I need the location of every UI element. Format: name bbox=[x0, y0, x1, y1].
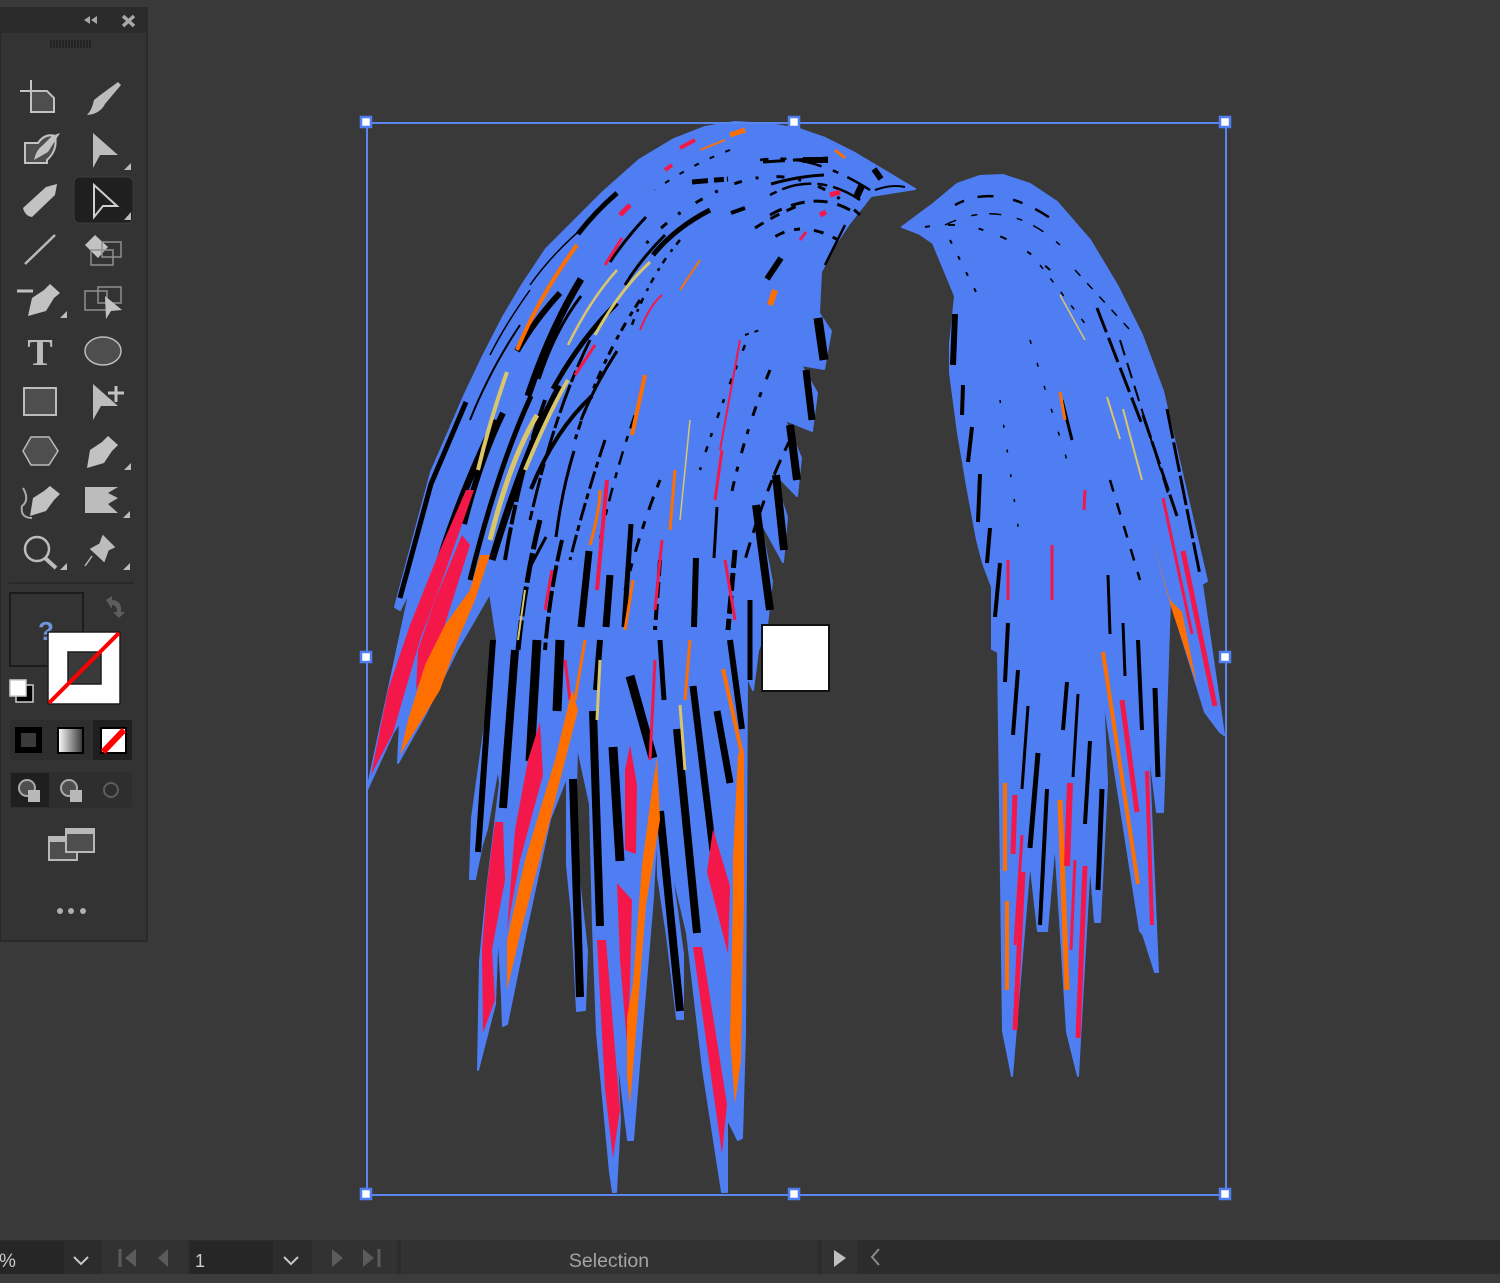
yellow streaks bbox=[1060, 295, 1142, 480]
icon: swap arrows bbox=[106, 596, 125, 618]
icon: rectangle bbox=[24, 388, 56, 415]
icon: pen with minus bbox=[17, 284, 67, 318]
left wing bbox=[367, 122, 915, 1192]
icon: arrow plus bbox=[93, 384, 124, 420]
icon: blob brush bbox=[25, 133, 60, 163]
status field: Selection bbox=[569, 1250, 649, 1272]
fill swatch none bbox=[48, 632, 120, 704]
icon: artboard selection bbox=[85, 287, 122, 319]
status field bbox=[401, 1240, 817, 1274]
icon: more tools dots bbox=[57, 908, 86, 914]
icon: line tool bbox=[25, 235, 55, 264]
icon: screen mode bbox=[49, 829, 94, 860]
yellow streaks bbox=[478, 262, 690, 770]
icon: direct selection arrow bbox=[93, 133, 131, 170]
zoom field bbox=[0, 1241, 64, 1274]
next and last buttons bbox=[312, 1240, 397, 1274]
icon: live paint bbox=[85, 235, 121, 265]
icon: zoom bbox=[25, 537, 67, 570]
black streaks bbox=[925, 196, 1200, 925]
icon: pencil bbox=[23, 184, 57, 217]
stroke swatch bbox=[10, 593, 83, 666]
selection handles bbox=[361, 117, 1230, 1199]
status play arrow bbox=[822, 1240, 857, 1274]
stroke swatch: ? bbox=[38, 616, 54, 646]
icon: selection tool active bbox=[74, 177, 133, 223]
icon: pin bbox=[85, 536, 130, 570]
panel header bbox=[0, 7, 146, 48]
artboard number field: 1 bbox=[195, 1251, 205, 1271]
icon: paintbrush bbox=[87, 82, 121, 115]
selection bounding box bbox=[367, 123, 1226, 1195]
draw mode buttons bbox=[10, 772, 132, 808]
icon: ellipse bbox=[85, 337, 121, 365]
artboard number field bbox=[190, 1241, 273, 1274]
icon: mesh shape bbox=[85, 487, 130, 518]
artboard dropdown bbox=[284, 1257, 298, 1264]
icon: hexagon bbox=[23, 437, 58, 465]
red accents bbox=[545, 140, 840, 760]
white centre square bbox=[762, 625, 829, 691]
icon: curvature pen bbox=[22, 486, 60, 518]
icon: type tool: T bbox=[27, 332, 53, 374]
black streaks: lower feathers bbox=[478, 640, 742, 1011]
tools panel bbox=[0, 7, 147, 941]
right wing bbox=[902, 175, 1224, 1076]
black streaks: upper wing bbox=[400, 150, 905, 680]
status bar bbox=[0, 1240, 1500, 1283]
status scroll arrow bbox=[872, 1249, 879, 1265]
first and previous buttons bbox=[102, 1240, 188, 1274]
red and orange feather tips bbox=[371, 490, 744, 1158]
zoom dropdown bbox=[74, 1257, 88, 1264]
icon: default fill and stroke bbox=[10, 680, 33, 702]
orange accents bbox=[517, 130, 845, 754]
colour mode buttons bbox=[10, 720, 132, 760]
icon: artboard tool bbox=[20, 80, 54, 112]
red and orange accents bbox=[1005, 392, 1215, 1038]
icon: pen tool bbox=[87, 436, 131, 470]
